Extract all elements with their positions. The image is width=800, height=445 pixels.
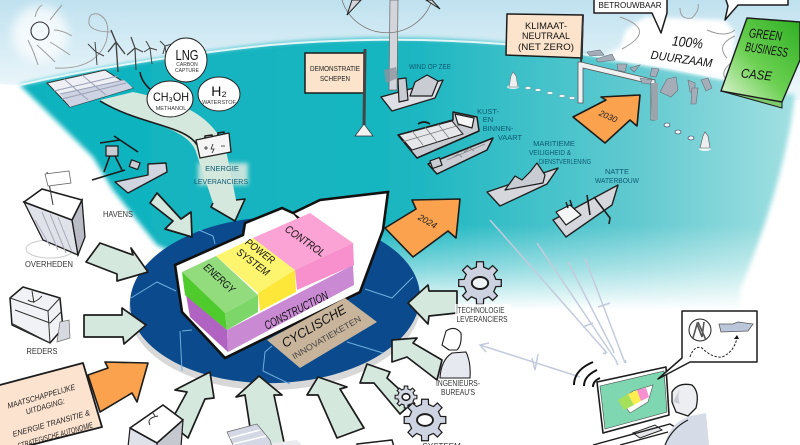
icon: wifi signal	[574, 362, 600, 387]
icon: engineer person	[440, 328, 470, 378]
harbor buildings	[587, 50, 712, 104]
arrow: engineers input	[392, 338, 442, 380]
label: reders: REDERS	[26, 347, 58, 356]
bubble: methanol: METHANOL	[156, 106, 186, 112]
label: kust en binnenvaart: EN	[483, 115, 493, 124]
block: energy	[182, 256, 258, 330]
arrow: societal challenge	[88, 362, 148, 412]
panel: cyclische innovatieketen: INNOVATIEKETEN	[290, 314, 363, 361]
label: havens: HAVENS	[103, 210, 133, 219]
speech bubble: betrouwbaar: BETROUWBAAR	[598, 0, 662, 10]
ship: maritime safety vessel	[487, 163, 558, 206]
label: kust en binnenvaart	[477, 107, 523, 142]
bubble: LNG carbon capture: LNG	[176, 47, 198, 64]
ship: wind vessel	[381, 75, 443, 111]
ship: container ship	[398, 112, 479, 158]
flag: demonstratie schepen	[305, 49, 373, 136]
label: kust en binnenvaart: KUST-	[477, 107, 500, 116]
callout: simulation screen	[658, 311, 757, 379]
sea	[20, 38, 795, 315]
ship: tanker barge	[428, 138, 493, 174]
book: green business case	[721, 18, 800, 108]
block: energy: ENERGY	[201, 262, 238, 296]
disk: innovation platform	[127, 212, 423, 388]
disk shadow	[126, 217, 424, 395]
icon: technology gear	[459, 262, 501, 304]
icon: shipowner container stack	[10, 287, 70, 343]
book: green business case: GREEN	[748, 25, 783, 44]
solar panel island	[47, 70, 133, 107]
bubble: methanol: CH₃OH	[153, 90, 189, 104]
label: technologie leveranciers: LEVERANCIERS	[456, 315, 508, 324]
bubble: methanol	[147, 81, 193, 117]
icon: monitor	[593, 367, 680, 445]
bubble: hydrogen: WATERSTOF	[202, 100, 237, 106]
bubble: hydrogen	[198, 77, 240, 111]
panel: maatschappelijke uitdaging: MAATSCHAPPELIJKE	[6, 382, 77, 411]
sea fade to white	[300, 225, 800, 310]
block: power system: SYSTEM	[234, 246, 272, 279]
arrow: 2024: 2024	[415, 212, 439, 231]
pier	[578, 15, 658, 120]
bubble: hydrogen: H₂	[211, 83, 227, 99]
label: wind op zee: WIND OP ZEE	[409, 62, 451, 71]
flag: demonstratie schepen: SCHEPEN	[320, 74, 350, 83]
icon: sun	[12, 5, 72, 65]
arrow: 2030: 2030	[597, 107, 619, 125]
lower white ground	[300, 309, 800, 445]
icon: government building	[24, 171, 85, 258]
arrow: 2030	[573, 95, 640, 143]
arrow: 2024	[385, 199, 460, 257]
sign: klimaatneutraal	[506, 14, 583, 58]
label: technologie leveranciers	[455, 304, 511, 325]
arrow: bottom left input	[170, 372, 214, 438]
horizon highlight	[20, 40, 725, 85]
arrow: overheden input	[86, 243, 148, 281]
icon: operator person	[665, 384, 709, 445]
icon: bottom stacked plates	[227, 424, 304, 445]
icon: large gear	[404, 399, 446, 441]
signal lines to the monitor	[490, 220, 626, 365]
label: maritieme veiligheid en dienstverlening	[529, 139, 591, 166]
label: ingenieursbureaus: BUREAU'S	[441, 388, 475, 397]
panel: cyclische innovatieketen	[267, 298, 377, 368]
bow line	[293, 213, 327, 238]
label: energie leveranciers: LEVERANCIERS	[194, 177, 248, 186]
panel: cyclische innovatieketen: CYCLISCHE	[279, 301, 349, 351]
speech bubble: betrouwbaar	[594, 0, 667, 33]
wireless arrow to engineers	[480, 343, 580, 377]
label: kust en binnenvaart: BINNEN-	[483, 124, 514, 133]
block: power system: POWER	[243, 237, 277, 267]
arrow: technology suppliers input	[408, 285, 457, 324]
text: 100% duurzaam: 100%	[671, 32, 704, 52]
icon: battery	[196, 132, 231, 158]
icon: port crane and ship	[92, 136, 167, 193]
icon: small gear	[395, 386, 417, 408]
panel: maatschappelijke uitdaging: ENERGIE TRANSITIE &	[12, 408, 91, 439]
burst strokes	[620, 4, 735, 78]
turbine with rotor	[342, 0, 440, 90]
text: 100% duurzaam	[650, 32, 713, 70]
ship outline	[175, 192, 388, 358]
arrow: bottom right input	[307, 377, 364, 438]
energy flow arrow	[100, 72, 245, 221]
bubble: LNG carbon capture: CAPTURE	[175, 68, 200, 74]
block: construction	[186, 265, 354, 352]
label: technologie leveranciers: TECHNOLOGIE	[458, 306, 504, 315]
text: 100% duurzaam: DUURZAAM	[650, 48, 713, 70]
label: maritieme veiligheid en dienstverlening: MARITIEME	[533, 139, 575, 148]
icon: wind spiral	[55, 14, 112, 68]
label: natte waterbouw: NATTE	[605, 167, 629, 176]
arrow: reders input	[84, 308, 146, 344]
label: energie leveranciers	[194, 163, 248, 186]
panel: maatschappelijke uitdaging: UITDAGING:	[25, 397, 66, 416]
label: maritieme veiligheid en dienstverlening: VEILIGHEID &	[529, 148, 571, 157]
block: power system	[216, 237, 296, 311]
panel: maatschappelijke uitdaging	[0, 363, 102, 445]
buoy left with dotted line	[507, 72, 575, 100]
arrow: bottom center input	[236, 376, 285, 445]
ship: dredger	[553, 185, 618, 237]
arrow: havens input	[150, 193, 192, 237]
label: natte waterbouw	[595, 167, 640, 185]
bubble: LNG carbon capture: CARBON	[176, 62, 198, 68]
flag: demonstratie schepen: DEMONSTRATIE	[310, 64, 360, 73]
label: natte waterbouw: WATERBOUW	[595, 176, 640, 185]
icon: bottom building roof	[357, 440, 394, 445]
offshore wind turbines	[88, 30, 172, 72]
block: construction: CONSTRUCTION	[262, 288, 331, 333]
buoy right with dotted line	[664, 123, 711, 151]
label: energie leveranciers: ENERGIE	[205, 164, 239, 173]
label: maritieme veiligheid en dienstverlening: DIENSTVERLENING	[539, 157, 591, 166]
speech bubble: top right	[725, 0, 788, 20]
label: ingenieursbureaus: INGENIEURS-	[436, 379, 480, 388]
white burst behind the business case	[600, 17, 735, 79]
label: ingenieursbureaus	[436, 379, 480, 397]
book: green business case: CASE	[740, 65, 773, 84]
label: kust en binnenvaart: VAART	[498, 133, 523, 142]
block: control: CONTROL	[282, 223, 327, 260]
bubble: LNG carbon capture	[165, 38, 207, 82]
icon: bottom left building	[128, 405, 183, 445]
sign: klimaatneutraal: NEUTRAAL	[522, 31, 570, 41]
label: overheden: OVERHEDEN	[25, 260, 73, 269]
sign: klimaatneutraal: (NET ZERO)	[518, 42, 574, 52]
sign: klimaatneutraal: KLIMAAT-	[525, 21, 567, 31]
block: control	[253, 213, 354, 290]
sky background	[0, 0, 800, 100]
arrow: system suppliers input	[360, 364, 413, 414]
